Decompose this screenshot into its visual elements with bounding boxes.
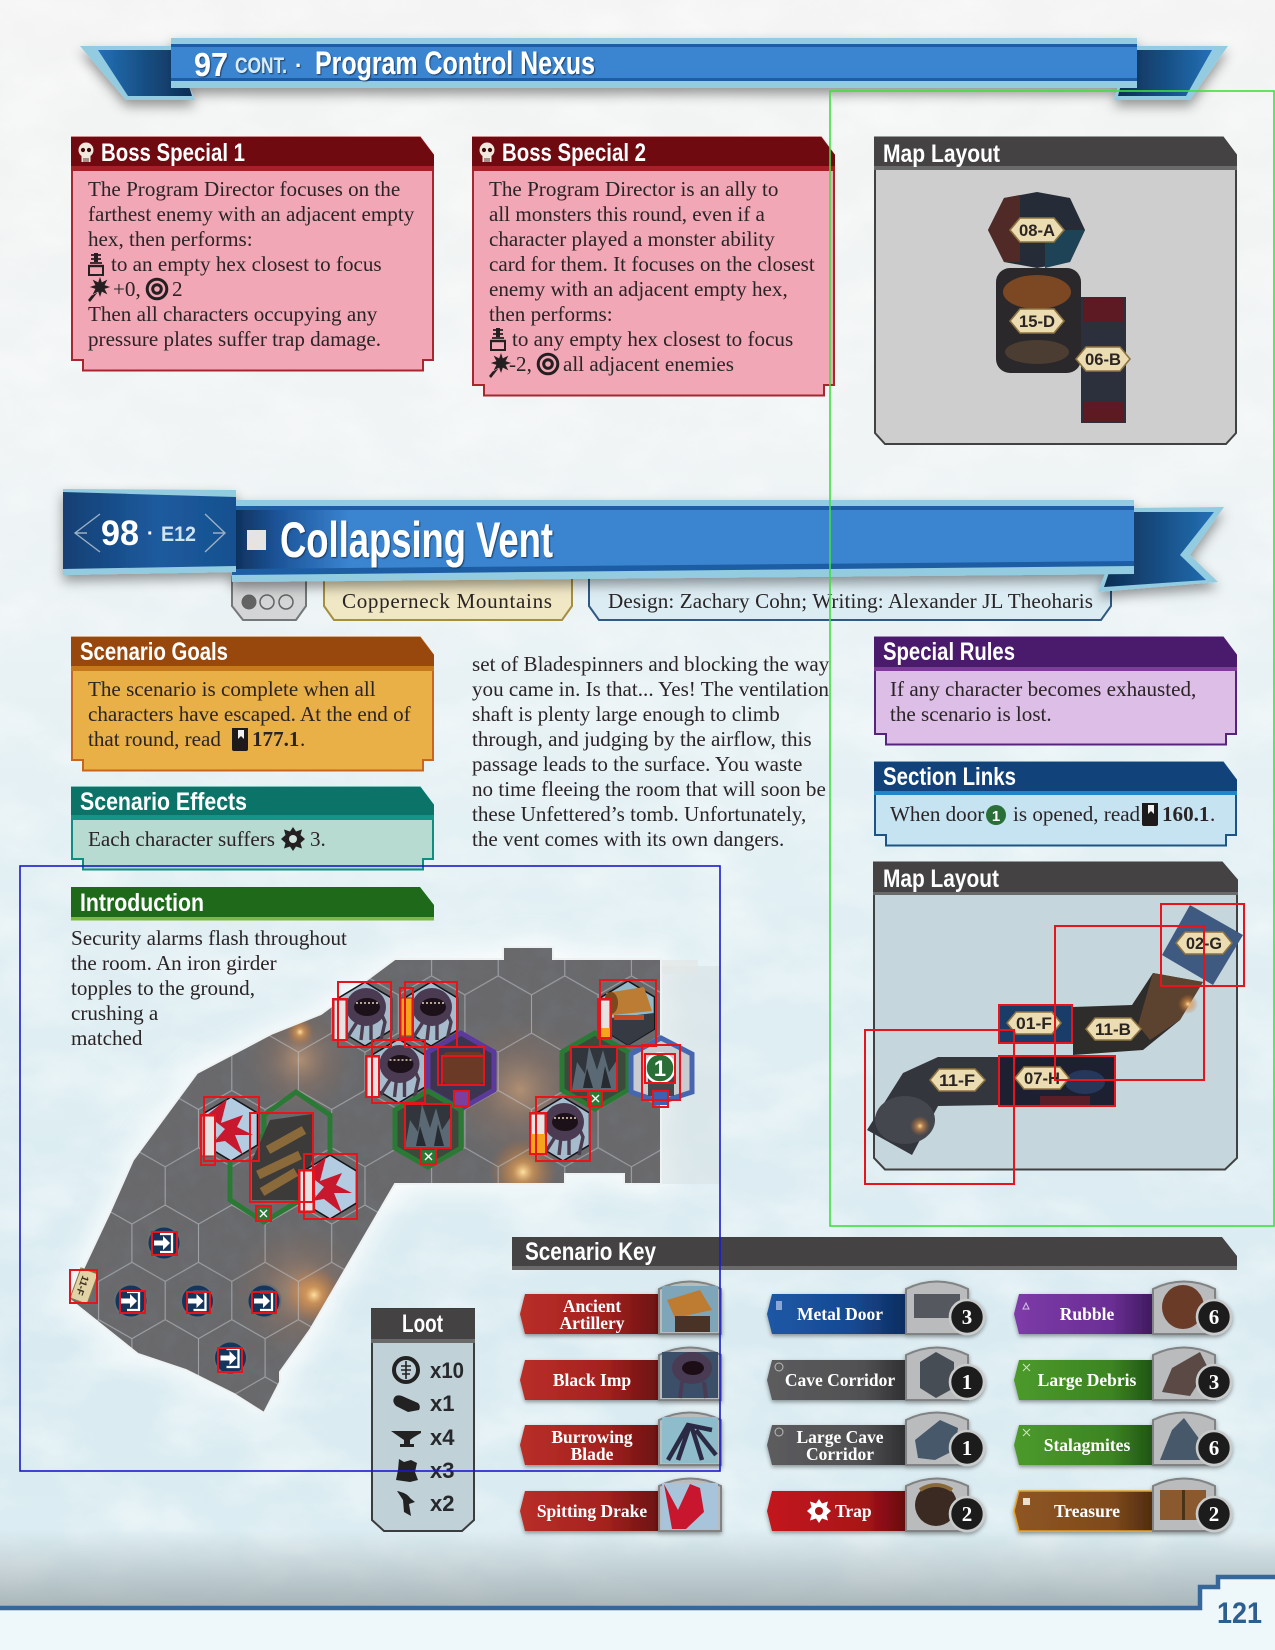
key: black imp [520,1348,721,1400]
key: large cave corridor: Corridor [806,1444,874,1464]
text: goals body [88,677,412,751]
text: section links body: 160.1 [1162,802,1209,826]
text: section links body: . [1210,802,1215,826]
heading: map layout: Map Layout [883,865,1000,893]
loot tokens [114,1226,280,1374]
ancient artillery [599,981,654,1045]
tile 11-B: 11-B [1095,1020,1131,1039]
banner title [194,45,595,83]
tile 08-A: 08-A [1019,221,1055,240]
map tile tag: 11-F [73,1274,90,1296]
monster: black imp [531,1097,590,1161]
map tile tag [70,1268,98,1304]
heading: scenario effects: Scenario Effects [80,788,247,816]
scenario number box: · [147,523,154,545]
key: cave corridor: Cave Corridor [785,1370,895,1390]
text: intro continued column: no time fleeing the room that will soon be [472,777,826,801]
difficulty tab [232,570,306,620]
key: large debris: Large Debris [1038,1370,1137,1390]
loot rows: x10 [430,1358,464,1383]
key: trap: 2 [962,1502,972,1526]
panel: boss special 1 [71,137,434,370]
panel: special rules [874,637,1237,744]
top banner: 97 cont. Program Control Nexus [80,38,1228,100]
key: large debris: 3 [1209,1370,1219,1394]
key: treasure: Treasure [1054,1501,1120,1521]
text: boss special 1 body [88,177,415,351]
key: cave corridor: 1 [962,1370,972,1394]
text: boss special 1 body: +0, [113,277,141,301]
text: boss special 2 body: card for them. It focuses on the closest [489,252,815,276]
monster: black imp [367,1039,425,1103]
map floor tile [60,940,670,1420]
tile 01-F [999,1005,1072,1043]
debris overlay [230,1092,330,1222]
text: boss special 2 body: all monsters this round, even if a [489,202,766,226]
key: trap [767,1478,984,1531]
banner title: CONT. [235,53,287,78]
banner title: · [295,53,302,78]
text: goals body: characters have escaped. At the end of [88,702,412,726]
key: large cave corridor: Large Cave [796,1427,884,1447]
tile 07-H [999,1056,1115,1106]
stalagmites [562,1033,628,1109]
text: special rules body [890,677,1196,726]
heading: boss special 1: Boss Special 1 [101,139,245,167]
key: cave corridor [767,1348,984,1400]
key: trap: Trap [835,1501,872,1521]
tile 11-F [867,1057,999,1155]
metal door with number 1 [631,1038,692,1105]
key: black imp: Black Imp [553,1370,631,1390]
panel: scenario effects [71,787,434,870]
key: spitting drake [520,1478,721,1531]
loot rows: x1 [430,1391,454,1416]
heading: special rules: Special Rules [883,638,1015,666]
left banner tail [80,46,195,100]
text: introduction body: matched [71,1026,143,1050]
text: effects body: 3. [310,827,326,851]
text: introduction body: topples to the ground, [71,976,255,1000]
text: goals body: that round, read [88,727,221,751]
icon: skull [480,142,494,162]
loot rows: x2 [430,1491,454,1516]
text: intro continued column: set of Bladespinners and blocking the way [472,652,830,676]
key: spitting drake: Spitting Drake [537,1501,647,1521]
text: intro continued column: these Unfettered’s tomb. Unfortunately, [472,802,806,826]
text: boss special 1 body: hex, then performs: [88,227,253,251]
panel: scenario key [512,1237,1237,1531]
heading: section links: Section Links [883,763,1016,791]
text: intro continued column: the vent comes with its own dangers. [472,827,784,851]
key: treasure [1014,1478,1231,1531]
key: large cave corridor [767,1412,984,1465]
text: boss special 2 body: The Program Director is an ally to [489,177,778,201]
metal door with number 1: 1 [654,1056,666,1081]
text: boss special 2 body [489,177,815,378]
heading: boss special 2: Boss Special 2 [502,139,646,167]
main ribbon [225,500,1134,582]
text: special rules body: If any character becomes exhausted, [890,677,1196,701]
panel: scenario goals [71,637,434,770]
monster: spitting drake [300,1155,356,1219]
key: stalagmites: 6 [1209,1436,1219,1460]
key: metal door [767,1282,984,1334]
tile 08-A [988,192,1085,268]
page number: 121 [1217,1597,1262,1630]
text: effects body: Each character suffers [88,827,275,851]
text: introduction body [71,926,347,1050]
text: boss special 2 body: character played a monster ability [489,227,775,251]
text: boss special 2 body: then performs: [489,302,613,326]
text: goals body: . [300,727,305,751]
heading: scenario goals: Scenario Goals [80,638,228,666]
text: introduction body: crushing a [71,1001,159,1025]
text: goals body: 177.1 [252,727,299,751]
tile 15-D: 15-D [1019,312,1055,331]
key: large cave corridor: 1 [962,1436,972,1460]
key: burrowing blade: Burrowing [551,1427,633,1447]
rubble [428,1033,494,1109]
text: boss special 1 body: pressure plates suffer trap damage. [88,327,381,351]
scenario 98 banner [63,489,1224,620]
right banner tail [1114,46,1228,100]
tile 02-G [1162,905,1243,985]
heading: introduction [71,887,434,920]
tile 11-F: 11-F [939,1071,975,1090]
text: intro continued column: you came in. Is that... Yes! The ventilation [472,677,829,701]
text: section links body: When door [890,802,984,826]
banner title: Program Control Nexus [315,45,595,81]
key: large debris [1014,1348,1231,1400]
key: rubble: Rubble [1060,1304,1114,1324]
tile 07-H: 07-H [1024,1069,1060,1088]
checkbox [247,530,266,550]
loot rows: x4 [430,1425,455,1450]
key: stalagmites: Stalagmites [1044,1435,1130,1455]
text: special rules body: the scenario is lost. [890,702,1052,726]
banner ribbon [171,38,1137,88]
text: introduction body: Security alarms flash throughout [71,926,347,950]
text: section links body: is opened, read [1013,802,1141,826]
key: burrowing blade: Blade [571,1444,614,1464]
icon: skull [78,142,94,162]
text: intro continued column: shaft is plenty large enough to climb [472,702,780,726]
banner title: 97 [194,46,228,83]
key: treasure: 2 [1209,1502,1219,1526]
key: ancient artillery: Ancient [563,1296,621,1316]
text: boss special 2 body: -2, [509,352,532,376]
key: metal door: 3 [962,1305,972,1329]
scenario number box: 98 [101,514,139,553]
credits tab [589,570,1111,620]
panel: section links [874,762,1237,846]
key: ancient artillery: Artillery [559,1313,625,1333]
scenario title: Collapsing Vent [280,512,553,568]
credits tab: Design: Zachary Cohn; Writing: Alexander JL Theoharis [608,589,1093,613]
tile 15-D [996,268,1081,373]
location tab [324,570,572,620]
panel: boss special 2 [472,137,835,396]
heading: map layout: Map Layout [883,140,1001,168]
heading: introduction: Introduction [80,889,204,917]
loot rows [391,1358,464,1516]
text: goals body: The scenario is complete when all [88,677,376,701]
faded continuation of map [661,960,720,1184]
text: section links body [890,802,1215,826]
tile 11-B [1073,973,1203,1055]
text: boss special 2 body: enemy with an adjacent empty hex, [489,277,788,301]
text: boss special 1 body: The Program Director focuses on the [88,177,400,201]
text: boss special 2 body: all adjacent enemies [563,352,734,376]
tile 06-B [1076,297,1130,423]
scenario number box [63,489,236,575]
text: section links body: 1 [992,808,1000,825]
text: boss special 1 body: to an empty hex closest to focus [111,252,382,276]
stalagmites [395,1091,461,1167]
scenario number box: E12 [161,523,196,546]
location tab: Copperneck Mountains [342,589,552,613]
text: intro continued column: through, and judging by the airflow, this [472,727,812,751]
key: burrowing blade [520,1412,721,1465]
text: boss special 1 body: farthest enemy with an adjacent empty [88,202,415,226]
key: rubble: 6 [1209,1305,1219,1329]
text: boss special 1 body: 2 [172,277,183,301]
panel: loot [371,1309,475,1531]
monster: black imp elite [401,982,458,1046]
panel: introduction heading and text [71,887,434,1050]
heading: loot: Loot [402,1310,444,1338]
text: intro continued column: passage leads to the surface. You waste [472,752,802,776]
panel: map layout 2 [867,862,1243,1170]
tile 02-G: 02-G [1186,934,1222,953]
page footer [0,1577,1275,1650]
loot rows: x3 [430,1458,454,1483]
key: metal door: Metal Door [797,1304,883,1324]
text: boss special 1 body: Then all characters occupying any [88,302,378,326]
monster: spitting drake [202,1097,258,1161]
monster: black imp [334,982,392,1046]
heading: scenario key [512,1237,1237,1270]
scenario map [60,940,720,1420]
key: stalagmites [1014,1412,1231,1465]
panel: map layout 1 [874,137,1237,444]
key: ancient artillery [520,1282,721,1334]
tile 01-F: 01-F [1016,1014,1052,1033]
tile 06-B: 06-B [1085,350,1121,369]
key: rubble [1014,1282,1231,1334]
text: intro continued column [472,652,830,851]
right swallowtail [1098,507,1224,592]
text: introduction body: the room. An iron girder [71,951,277,975]
text: boss special 2 body: to any empty hex closest to focus [512,327,793,351]
heading: scenario key: Scenario Key [525,1238,656,1266]
